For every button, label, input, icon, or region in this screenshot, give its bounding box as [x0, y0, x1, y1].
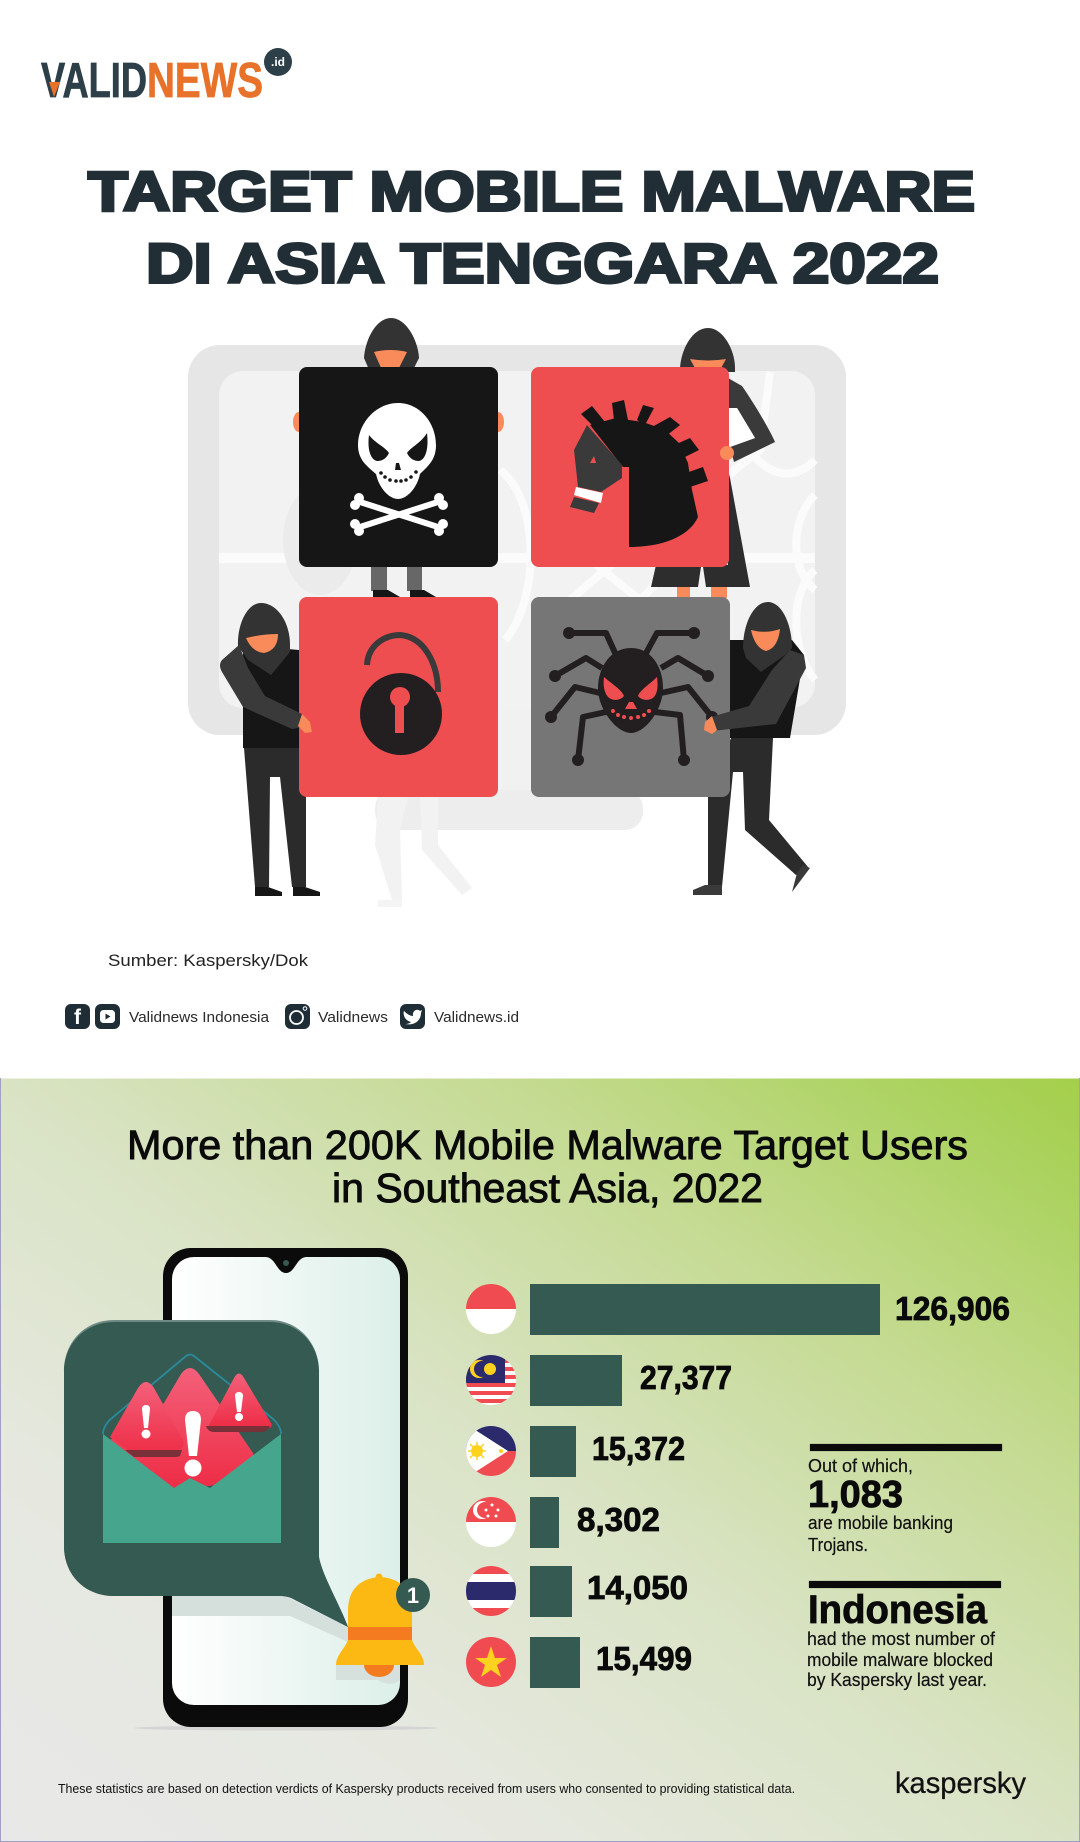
panel: Kaspersky statistics — [0, 1078, 1080, 1842]
row: Thailand — [466, 1566, 688, 1617]
logo: Validnews.id: .id — [271, 55, 285, 69]
card: skull and crossbones — [299, 367, 498, 567]
source note: Sumber: Kaspersky/Dok — [108, 951, 309, 970]
row: Thailand: 14,050 — [587, 1569, 688, 1606]
bar chart: malware targets per country — [466, 1284, 1010, 1688]
panel heading: More than 200K Mobile Malware Target Users — [127, 1122, 968, 1168]
row: Singapore — [466, 1497, 660, 1548]
callout: banking trojans: 1,083 — [808, 1474, 903, 1516]
row: Indonesia — [466, 1284, 1010, 1335]
callout: Indonesia most blocked: by Kaspersky last year. — [807, 1670, 987, 1690]
figure: bottom-right hacker — [693, 602, 810, 895]
card: open padlock — [299, 597, 498, 797]
row: Singapore: 8,302 — [577, 1501, 660, 1538]
icon: twitter — [400, 1004, 425, 1029]
illustration: phone with alert bubble — [64, 1248, 438, 1730]
logo: Validnews.id: VALID — [41, 54, 147, 108]
figure: bottom-left hacker — [238, 603, 320, 896]
social label: Validnews Indonesia: Validnews Indonesia — [129, 1009, 270, 1026]
title: DI ASIA TENGGARA 2022 — [146, 232, 939, 294]
callout: Indonesia most blocked — [807, 1581, 1001, 1690]
icon: notification bell — [336, 1574, 430, 1677]
callout: banking trojans: are mobile banking — [808, 1513, 953, 1533]
callout: banking trojans: Out of which, — [808, 1456, 913, 1476]
footnote: These statistics are based on detection verdicts of Kaspersky products received from users who consented to providing statistical data. — [58, 1782, 795, 1796]
panel heading — [127, 1122, 968, 1211]
illustration: hackers holding malware cards — [188, 318, 846, 907]
icon: notification bell: 1 — [407, 1583, 419, 1608]
callout: Indonesia most blocked: mobile malware blocked — [807, 1650, 993, 1670]
card: spider — [531, 597, 730, 797]
icon: youtube — [95, 1004, 120, 1029]
row: Indonesia: 126,906 — [895, 1290, 1010, 1327]
card: trojan horse — [531, 367, 729, 567]
callout: Indonesia most blocked: Indonesia — [808, 1588, 988, 1632]
callout: Indonesia most blocked: had the most number of — [807, 1629, 996, 1649]
logo: Validnews.id: NEWS — [147, 54, 263, 108]
logo: Validnews.id — [41, 48, 292, 108]
logo: Kaspersky: kaspersky — [895, 1767, 1026, 1800]
alert speech bubble — [64, 1320, 348, 1627]
ghost monitor background — [188, 345, 846, 907]
title: TARGET MOBILE MALWARE — [88, 160, 975, 222]
social label: Validnews.id: Validnews.id — [434, 1009, 519, 1026]
icon: instagram — [285, 1004, 310, 1029]
row: Malaysia: 27,377 — [640, 1359, 732, 1396]
figure: top-left hacker — [293, 318, 504, 597]
row: Malaysia — [466, 1355, 732, 1406]
callout: banking trojans: Trojans. — [808, 1535, 868, 1555]
row: Philippines — [466, 1424, 685, 1478]
title — [88, 160, 975, 294]
icon: facebook: f — [74, 1006, 82, 1029]
row: Philippines: 15,372 — [592, 1430, 685, 1467]
social media row — [65, 1004, 519, 1029]
social label: Validnews: Validnews — [318, 1009, 388, 1026]
callout: banking trojans — [808, 1444, 1002, 1555]
row: Vietnam: 15,499 — [596, 1640, 692, 1677]
envelope with warning triangles — [103, 1354, 281, 1543]
panel heading: in Southeast Asia, 2022 — [332, 1165, 763, 1211]
row: Vietnam — [466, 1637, 692, 1688]
figure: top-right hacker — [651, 328, 775, 598]
arms and hands over the cards — [220, 446, 806, 734]
icon: facebook — [65, 1004, 90, 1029]
